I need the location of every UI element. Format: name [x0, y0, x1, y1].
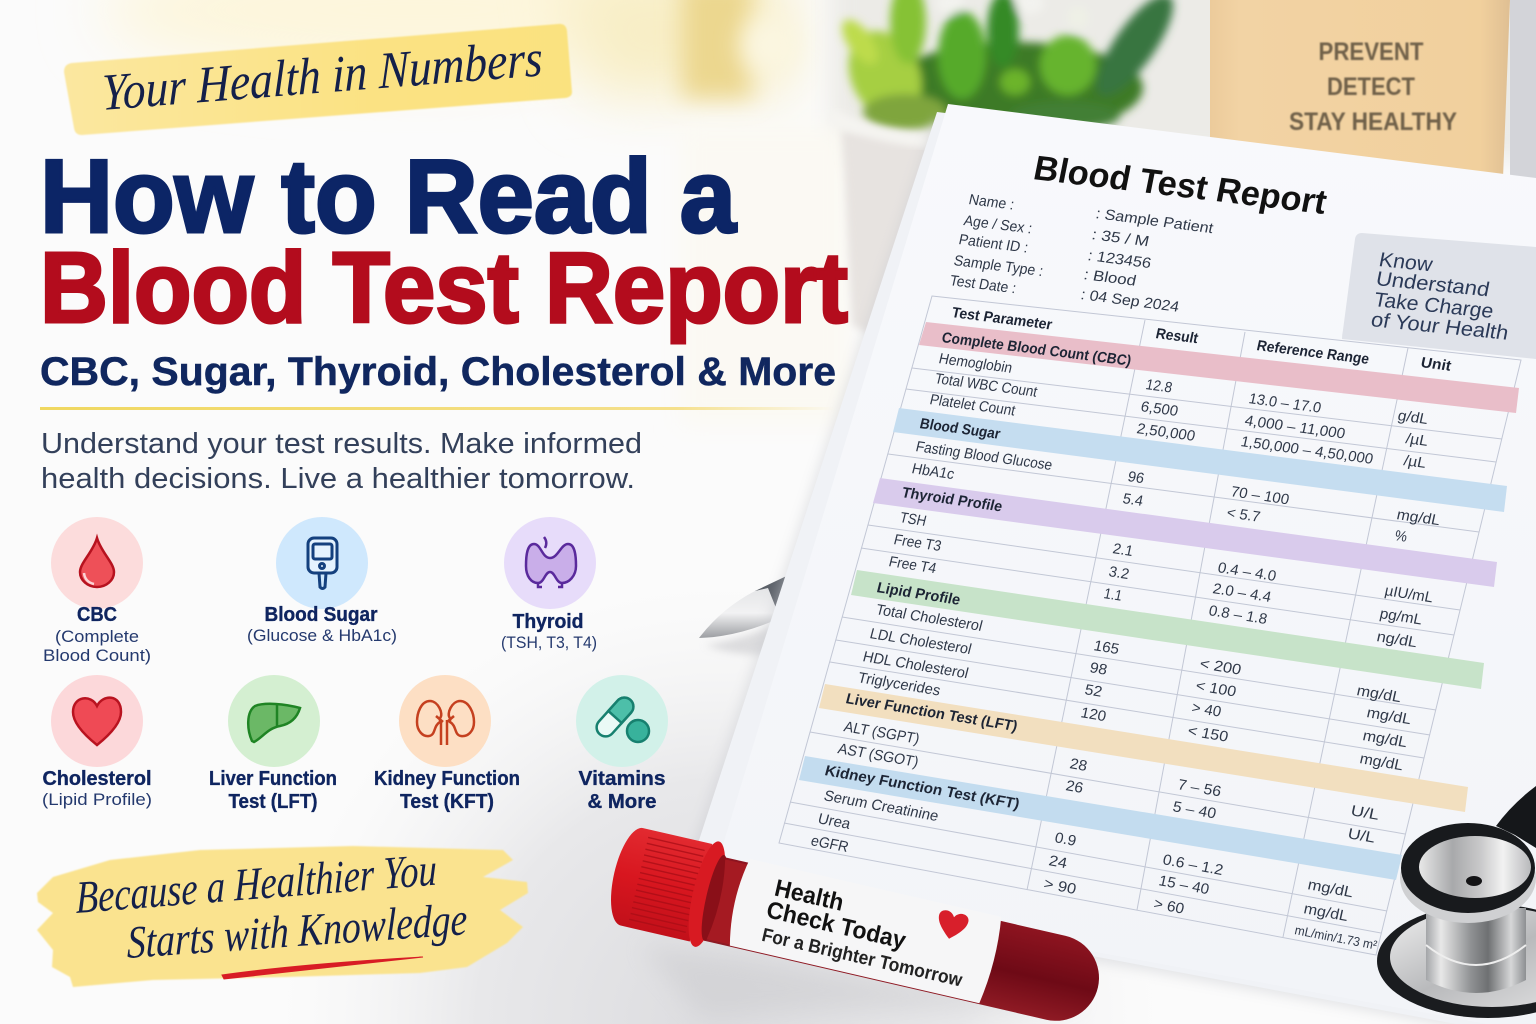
patient details: : 123456 — [1086, 248, 1153, 272]
table column: reference ranges: 0.6 – 1.2 — [1161, 852, 1225, 879]
table column: reference ranges: 15 – 40 — [1157, 873, 1211, 898]
table column: units: U/L — [1349, 803, 1381, 824]
table column: test parameters: Serum Creatinine — [822, 788, 940, 825]
table column: reference ranges: 70 – 100 — [1229, 484, 1291, 508]
tube label: Check Today — [764, 896, 909, 955]
table column: test parameters: eGFR — [809, 833, 850, 856]
table column: units: mg/dL — [1358, 751, 1405, 774]
item: kidney function: Test (KFT) — [400, 791, 494, 813]
callout: because a healthier you: Because a Healthier You — [76, 844, 437, 923]
table column: reference ranges: > 40 — [1190, 700, 1223, 721]
table column: results: 5.4 — [1121, 491, 1145, 510]
item: CBC: CBC — [77, 604, 117, 626]
item: CBC — [43, 517, 151, 665]
table column: units: U/L — [1346, 826, 1377, 847]
box: prevent detect stay healthy — [1210, 0, 1510, 178]
table header: Reference Range — [1255, 338, 1371, 368]
table column: test parameters: Blood Sugar — [918, 416, 1002, 443]
table column: results — [1042, 377, 1197, 898]
table column: test parameters: Total WBC Count — [933, 371, 1039, 401]
patient details: Patient ID : — [957, 232, 1030, 257]
table column: test parameters: TSH — [898, 510, 928, 530]
patient details — [948, 192, 1215, 316]
table column: test parameters: HbA1c — [910, 461, 956, 483]
side note: know understand: Understand — [1374, 268, 1491, 301]
table column: results: 6,500 — [1139, 399, 1180, 420]
table column: test parameters: Liver Function Test (LFT) — [844, 691, 1019, 735]
table column: test parameters: Free T3 — [892, 532, 943, 555]
table column: reference ranges: 5 – 40 — [1171, 799, 1218, 822]
item: cholesterol: Cholesterol — [42, 768, 152, 790]
table column: units: pg/mL — [1378, 606, 1424, 628]
side note: know understand: Take Charge — [1372, 289, 1495, 323]
table column: reference ranges: < 200 — [1198, 656, 1243, 679]
table header — [950, 305, 1453, 375]
patient details: : 04 Sep 2024 — [1079, 287, 1181, 316]
box: prevent detect stay healthy: STAY HEALTHY — [1289, 108, 1457, 136]
item: thyroid: (TSH, T3, T4) — [501, 633, 597, 652]
table column: results: 165 — [1092, 638, 1121, 658]
table column: test parameters: Urea — [816, 811, 853, 833]
item: vitamins — [576, 675, 668, 813]
callout: because a healthier you: Starts with Knowledge — [127, 893, 467, 968]
tube label: Health — [772, 875, 846, 917]
table column: results: 26 — [1064, 778, 1085, 797]
table column: reference ranges: 0.8 – 1.8 — [1207, 603, 1269, 628]
item: kidney function: Kidney Function — [374, 768, 520, 790]
table column: units: ng/dL — [1375, 629, 1419, 651]
table column: units: mg/dL — [1365, 705, 1413, 728]
red underline stroke — [222, 957, 423, 979]
tagline: your health in numbers: Your Health in Numbers — [102, 30, 543, 122]
panel: blood test report paper — [680, 104, 1536, 1024]
table column: reference ranges: 2.0 – 4.4 — [1211, 581, 1273, 606]
patient details: : Blood — [1082, 267, 1138, 290]
table column: test parameters: AST (SGOT) — [836, 741, 920, 771]
item: blood sugar: Blood Sugar — [264, 604, 378, 626]
table column: units: mg/dL — [1395, 507, 1442, 529]
table column: test parameters: Total Cholesterol — [874, 602, 984, 635]
main title — [40, 139, 848, 344]
table column: reference ranges: < 5.7 — [1225, 505, 1262, 526]
table column: test parameters: Fasting Blood Glucose — [914, 439, 1054, 474]
table column: test parameters: Platelet Count — [928, 392, 1017, 419]
table column: units — [1293, 408, 1442, 953]
patient details: Name : — [967, 192, 1016, 214]
tube label: For a Brighter Tomorrow — [760, 925, 964, 991]
patient details: Age / Sex : — [962, 213, 1034, 237]
table column: test parameters: HDL Cholesterol — [861, 649, 970, 682]
table column: units: mg/dL — [1302, 901, 1350, 925]
stethoscope — [1377, 786, 1536, 1018]
table column: results: 52 — [1083, 682, 1104, 701]
table column: results: 96 — [1126, 469, 1146, 487]
table column: reference ranges — [1152, 391, 1375, 918]
table column: test parameters: Hemoglobin — [937, 351, 1014, 377]
table column: results: > 90 — [1042, 876, 1078, 898]
table column: results: 2,50,000 — [1135, 421, 1197, 445]
icon: heart — [73, 698, 121, 745]
table column: units: mg/dL — [1306, 877, 1355, 901]
table column: units: mg/dL — [1361, 728, 1409, 751]
blood test tube — [602, 820, 1111, 1024]
box: prevent detect stay healthy: PREVENT — [1318, 38, 1424, 66]
table column: test parameters: Thyroid Profile — [900, 485, 1004, 515]
table column: test parameters: ALT (SGPT) — [842, 719, 921, 748]
item: blood sugar: (Glucose & HbA1c) — [247, 626, 397, 645]
intro paragraph — [41, 428, 642, 495]
item: vitamins: & More — [588, 791, 656, 813]
table grid — [779, 296, 1521, 955]
pot rim — [830, 116, 930, 142]
pot — [842, 130, 940, 340]
table header: Unit — [1419, 355, 1453, 375]
table column: reference ranges: 0.4 – 4.0 — [1216, 560, 1278, 585]
test tube shadow — [640, 945, 1090, 1015]
divider — [40, 407, 835, 410]
table column: test parameters: LDL Cholesterol — [868, 626, 973, 658]
table column: test parameters: Triglycerides — [856, 670, 942, 699]
item: liver function — [209, 675, 337, 813]
tube label — [725, 858, 1004, 1004]
item: liver function: Test (LFT) — [228, 791, 318, 813]
side note: know understand — [1342, 233, 1536, 359]
table column: results: 12.8 — [1144, 377, 1174, 396]
table column: units: /µL — [1402, 453, 1428, 472]
table column: test parameters: Complete Blood Count (CBC) — [940, 330, 1133, 370]
table column: units: mg/dL — [1355, 683, 1403, 706]
table column: reference ranges: < 150 — [1186, 723, 1230, 746]
icon: liver — [248, 704, 300, 742]
table column: reference ranges: > 60 — [1152, 896, 1186, 918]
side note: know understand: of Your Health — [1369, 309, 1510, 345]
table column: reference ranges: 13.0 – 17.0 — [1247, 391, 1323, 417]
pen — [699, 572, 795, 655]
table column: results: 2.1 — [1111, 541, 1135, 560]
box: prevent detect stay healthy: DETECT — [1327, 73, 1415, 101]
main title: How to Read a — [40, 139, 737, 255]
intro paragraph: Understand your test results. Make informed — [41, 428, 642, 460]
callout: because a healthier you — [37, 844, 528, 987]
table column: reference ranges: < 100 — [1194, 678, 1238, 701]
icon: kidneys — [417, 701, 474, 745]
table column: reference ranges: 7 – 56 — [1176, 777, 1223, 800]
item: blood sugar — [247, 517, 397, 645]
patient details: : 35 / M — [1090, 227, 1151, 250]
patient details: Sample Type : — [952, 253, 1045, 280]
table column: test parameters: Free T4 — [887, 554, 938, 577]
item: vitamins: Vitamins — [578, 768, 666, 790]
table header: Result — [1154, 326, 1200, 347]
table column: results: 0.9 — [1053, 830, 1078, 850]
item: liver function: Liver Function — [209, 768, 337, 790]
plant — [835, 0, 1186, 134]
patient details: Test Date : — [948, 273, 1018, 297]
icon: thyroid — [526, 537, 576, 587]
table column: test parameters — [809, 330, 1133, 856]
table column: results: 120 — [1079, 705, 1108, 725]
table column: results: 98 — [1088, 660, 1109, 679]
table column: results: 28 — [1068, 756, 1089, 775]
table column: units: /µL — [1404, 431, 1430, 450]
item: CBC: (Complete — [55, 627, 139, 646]
table column: test parameters: Kidney Function Test (KFT) — [823, 763, 1021, 813]
icon: pills — [593, 694, 649, 742]
table column: units: % — [1393, 528, 1409, 546]
intro paragraph: health decisions. Live a healthier tomorrow. — [41, 463, 635, 495]
item: thyroid: Thyroid — [512, 611, 584, 633]
table column: units: µIU/mL — [1383, 583, 1435, 606]
item: thyroid — [501, 517, 597, 652]
table column: test parameters: Lipid Profile — [875, 580, 962, 609]
table column: units: g/dL — [1396, 408, 1430, 428]
icon: glucose meter — [308, 538, 337, 588]
icon: blood drop — [80, 538, 114, 587]
report title: Blood Test Report — [1030, 149, 1330, 222]
table column: units: mL/min/1.73 m² — [1293, 922, 1379, 953]
item: kidney function — [374, 675, 520, 813]
item: cholesterol: (Lipid Profile) — [42, 790, 152, 809]
table column: results: 1.1 — [1102, 586, 1124, 605]
table column: reference ranges: 1,50,000 – 4,50,000 — [1239, 434, 1375, 468]
item: cholesterol — [42, 675, 152, 809]
patient details: : Sample Patient — [1094, 206, 1215, 237]
table column: results: 24 — [1047, 853, 1069, 872]
subtitle: CBC, Sugar, Thyroid, Cholesterol & More — [40, 350, 836, 394]
section bands — [799, 322, 1519, 880]
table header: Test Parameter — [950, 305, 1054, 333]
side note: know understand: Know — [1377, 249, 1435, 276]
table column: reference ranges: 4,000 – 11,000 — [1243, 413, 1347, 442]
main title: Blood Test Report — [40, 232, 848, 344]
table column: results: 3.2 — [1107, 564, 1131, 583]
item: CBC: Blood Count) — [43, 646, 151, 665]
